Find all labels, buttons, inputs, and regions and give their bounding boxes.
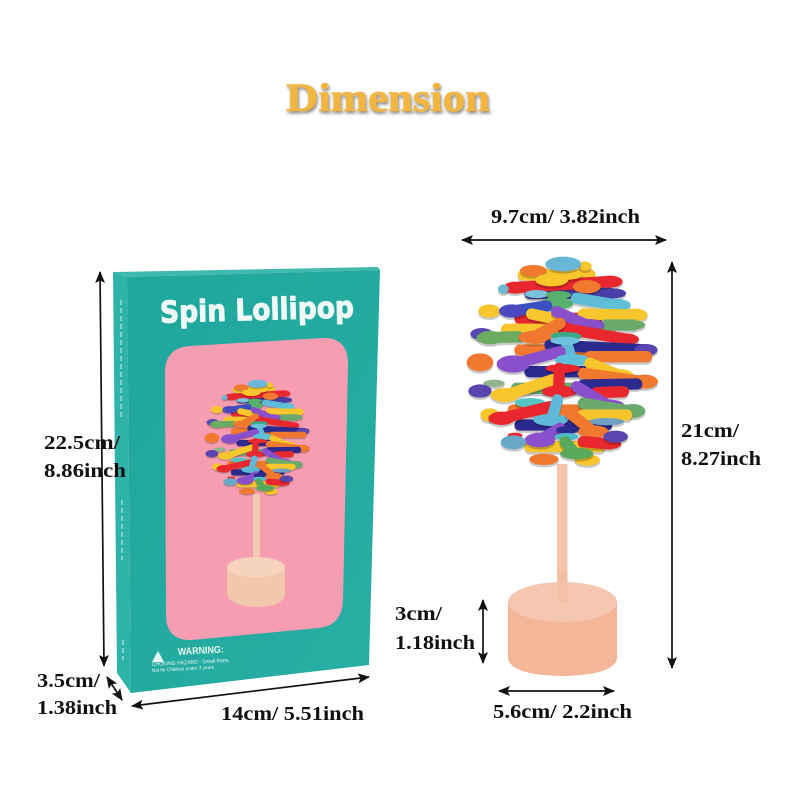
mini lollipop head xyxy=(205,380,310,495)
label: lollipop width: 9.7cm/ 3.82inch xyxy=(491,206,640,228)
label: lollipop height: 8.27inch xyxy=(681,448,761,470)
box spine xyxy=(113,272,131,693)
label: base width: 5.6cm/ 2.2inch xyxy=(493,701,632,723)
lollipop base xyxy=(508,570,617,676)
label: box depth: 1.38inch xyxy=(37,697,117,719)
box spine print xyxy=(121,300,123,660)
label: lollipop height xyxy=(681,420,761,470)
warning label: WARNING: xyxy=(178,645,224,658)
arrow: box depth xyxy=(107,677,122,700)
arrow: box height xyxy=(100,272,104,666)
arrow: base width xyxy=(499,690,614,692)
mini lollipop stem xyxy=(253,494,260,572)
warning label xyxy=(152,645,230,674)
label: box depth: 3.5cm/ xyxy=(37,670,100,692)
arrow: base height xyxy=(482,600,484,663)
label: box width: 14cm/ 5.51inch xyxy=(221,703,364,725)
warning label: CHOKING HAZARD - Small Parts. xyxy=(152,658,230,668)
label: base height: 1.18inch xyxy=(395,632,475,654)
label: base height: 3cm/ xyxy=(395,603,443,625)
mini lollipop base xyxy=(227,557,285,607)
title: Dimension xyxy=(286,75,490,120)
label: box height xyxy=(44,432,126,482)
arrow: top width xyxy=(462,239,666,241)
label: base height xyxy=(395,603,475,654)
label: box height: 8.86inch xyxy=(44,460,126,482)
warning label: Not for Children under 3 years xyxy=(152,665,214,674)
lollipop head xyxy=(467,257,658,466)
box top flap xyxy=(113,267,380,277)
arrow: box width xyxy=(132,677,369,706)
pink window xyxy=(165,338,348,640)
label: box depth xyxy=(37,670,117,719)
label: lollipop height: 21cm/ xyxy=(681,420,740,442)
product box xyxy=(113,267,380,693)
box name: Spin Lollipop xyxy=(160,290,354,331)
arrow: lollipop height xyxy=(671,262,673,668)
label: box height: 22.5cm/ xyxy=(44,432,121,454)
lollipop stem xyxy=(557,464,568,604)
box front face xyxy=(127,270,380,693)
